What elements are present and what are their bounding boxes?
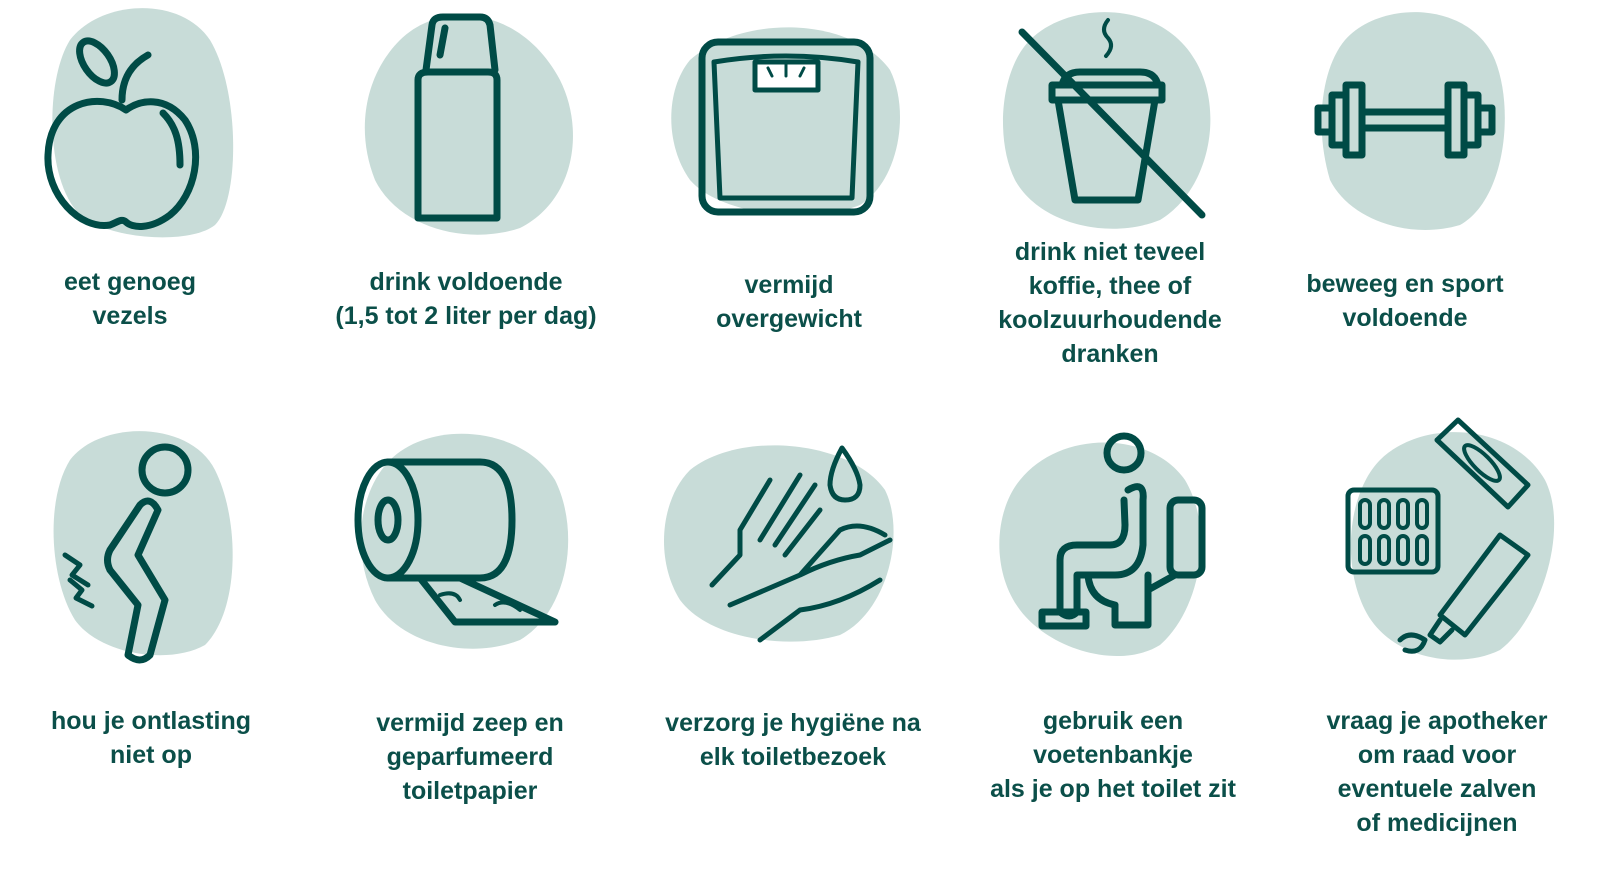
- panel: vermijd overgewicht: [671, 27, 900, 333]
- text: [665, 709, 922, 771]
- blob: [671, 27, 900, 215]
- text: [1306, 270, 1504, 332]
- text: overgewicht: [716, 305, 863, 333]
- panel: voetenbankje: [990, 436, 1237, 803]
- text: [998, 238, 1222, 368]
- blob: [52, 8, 233, 237]
- text: vermijd: [745, 271, 833, 299]
- text: vraag je apotheker: [1327, 707, 1548, 735]
- icon: dumbbell: [1318, 85, 1492, 155]
- text: dranken: [1061, 340, 1159, 368]
- icon: cup crossed: [1022, 20, 1202, 215]
- blob: [999, 442, 1201, 656]
- text: als je op het toilet zit: [990, 775, 1237, 803]
- icon: medicines: [1348, 420, 1528, 651]
- panel: hou je ontlasting niet op: [51, 431, 251, 769]
- text: koolzuurhoudende: [998, 306, 1222, 334]
- text: [716, 271, 863, 333]
- text: [64, 268, 196, 330]
- text: drink niet teveel: [1015, 238, 1205, 266]
- panel: zeep: [358, 434, 568, 805]
- text: om raad voor: [1358, 741, 1516, 769]
- text: eventuele zalven: [1338, 775, 1536, 803]
- text: geparfumeerd: [387, 743, 553, 771]
- text: of medicijnen: [1356, 809, 1518, 837]
- text: elk toiletbezoek: [700, 743, 886, 771]
- icon: scale: [702, 42, 870, 212]
- text: [51, 707, 251, 769]
- text: [1327, 707, 1548, 837]
- text: [990, 707, 1237, 803]
- blob: [1351, 432, 1554, 660]
- blob: [664, 445, 894, 642]
- text: eet genoeg: [64, 268, 196, 296]
- text: drink voldoende: [369, 268, 563, 296]
- icon: bottle: [418, 17, 497, 218]
- text: niet op: [110, 741, 192, 769]
- text: koffie, thee of: [1029, 272, 1192, 300]
- panel: apotheker: [1327, 420, 1554, 837]
- text: [376, 709, 564, 805]
- icon: person holding: [65, 447, 188, 660]
- icon: person on toilet: [1042, 436, 1202, 626]
- panel: koffie: [998, 12, 1222, 368]
- icon: hands and drop: [712, 448, 890, 640]
- text: hou je ontlasting: [51, 707, 251, 735]
- text: voetenbankje: [1033, 741, 1193, 769]
- text: vermijd zeep en: [376, 709, 564, 737]
- text: vezels: [92, 302, 168, 330]
- blob: [1003, 12, 1210, 229]
- blob: [365, 15, 573, 235]
- text: (1,5 tot 2 liter per dag): [335, 302, 597, 330]
- text: voldoende: [1342, 304, 1468, 332]
- blob: [361, 434, 568, 649]
- panel: drink voldoende: [335, 15, 597, 330]
- blob: [54, 431, 233, 655]
- text: [335, 268, 597, 330]
- text: verzorg je hygiëne na: [665, 709, 922, 737]
- panel: eet genoeg vezels: [48, 8, 233, 330]
- icon: toilet roll: [358, 462, 555, 622]
- icon: apple: [48, 35, 196, 226]
- text: beweeg en sport: [1306, 270, 1504, 298]
- panel: beweeg: [1306, 12, 1505, 332]
- text: gebruik een: [1043, 707, 1183, 735]
- text: toiletpapier: [403, 777, 538, 805]
- blob: [1322, 12, 1505, 230]
- panel: hygiene: [664, 445, 922, 771]
